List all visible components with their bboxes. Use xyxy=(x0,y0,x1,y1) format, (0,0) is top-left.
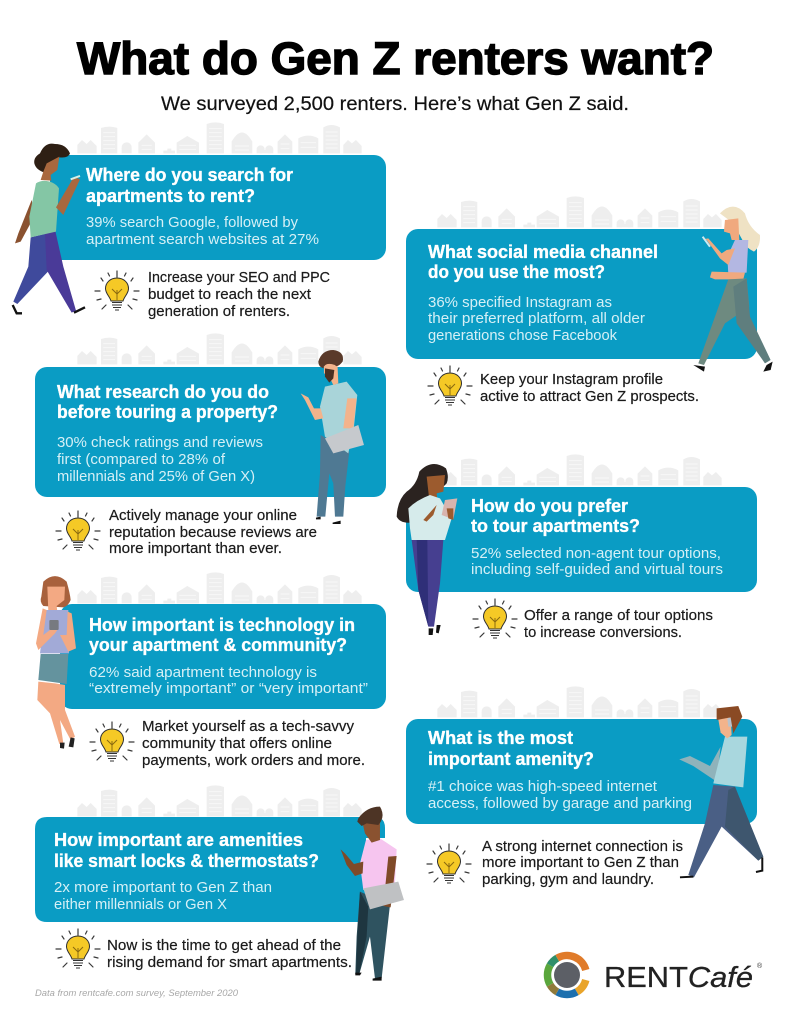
card background xyxy=(35,817,385,922)
heading: Where do you search for xyxy=(86,165,293,185)
tip text xyxy=(148,269,330,320)
panel: social media xyxy=(406,207,773,405)
heading xyxy=(89,615,355,655)
statistic text: apartment search websites at 27% xyxy=(86,231,319,248)
panel: smart amenities xyxy=(35,807,404,981)
tip text xyxy=(109,507,317,557)
tip text: generation of renters. xyxy=(148,303,290,320)
tip text: A strong internet connection is xyxy=(482,838,683,855)
panel: tour xyxy=(397,464,757,641)
card background xyxy=(60,604,386,709)
panel: amenity xyxy=(406,706,763,888)
heading: What social media channel xyxy=(428,242,658,262)
card background xyxy=(406,229,757,359)
heading: What research do you do xyxy=(57,382,269,402)
heading xyxy=(86,165,293,206)
figure: walking man xyxy=(13,144,85,313)
card background xyxy=(50,155,386,260)
logo mark xyxy=(547,956,586,995)
heading: How important are amenities xyxy=(54,830,303,850)
registered mark: ® xyxy=(757,962,763,970)
tip text xyxy=(524,607,713,641)
statistic text xyxy=(471,545,723,578)
heading xyxy=(54,830,319,871)
statistic text xyxy=(86,214,319,248)
tip text: Actively manage your online xyxy=(109,507,297,524)
title: What do Gen Z renters want? xyxy=(77,33,714,84)
statistic text xyxy=(428,294,645,344)
figure: blonde woman xyxy=(693,207,773,372)
tip text: Offer a range of tour options xyxy=(524,607,713,624)
statistic text xyxy=(89,664,368,697)
figure: woman with tablet xyxy=(397,464,457,635)
source note: Data from rentcafe.com survey, September 2020 xyxy=(35,988,239,999)
statistic text: 62% said apartment technology is xyxy=(89,664,317,681)
logo: RENTCafé xyxy=(547,956,763,995)
subtitle: We surveyed 2,500 renters. Here’s what Gen Z said. xyxy=(161,93,629,115)
statistic text: 39% search Google, followed by xyxy=(86,214,298,231)
tip text: budget to reach the next xyxy=(148,286,312,303)
statistic text xyxy=(54,879,272,913)
tip text: Increase your SEO and PPC xyxy=(148,269,330,286)
icon: light bulb xyxy=(90,722,134,761)
tip text: active to attract Gen Z prospects. xyxy=(480,388,699,405)
tip text xyxy=(107,937,352,971)
panel: research xyxy=(35,350,386,557)
statistic text: access, followed by garage and parking xyxy=(428,795,692,812)
heading: to tour apartments? xyxy=(471,516,640,536)
icon: light bulb xyxy=(56,929,100,968)
tip text: parking, gym and laundry. xyxy=(482,871,654,888)
heading: How important is technology in xyxy=(89,615,355,635)
card background xyxy=(406,719,757,824)
statistic text: including self-guided and virtual tours xyxy=(471,561,723,578)
statistic text: generations chose Facebook xyxy=(428,327,617,344)
heading: your apartment & community? xyxy=(89,635,347,655)
statistic text: either millennials or Gen X xyxy=(54,896,227,913)
tip text: rising demand for smart apartments. xyxy=(107,954,352,971)
heading: apartments to rent? xyxy=(86,186,255,206)
statistic text: “extremely important” or “very important” xyxy=(89,680,368,697)
heading xyxy=(428,728,594,769)
tip text: Keep your Instagram profile xyxy=(480,371,663,388)
figure: bearded man xyxy=(301,350,364,524)
figure: woman with laptop xyxy=(341,807,404,981)
heading xyxy=(428,242,658,282)
panel: search xyxy=(13,144,386,320)
heading: do you use the most? xyxy=(428,262,605,282)
heading: important amenity? xyxy=(428,749,594,769)
statistic text: 30% check ratings and reviews xyxy=(57,434,263,451)
figure: man on phone xyxy=(679,706,763,877)
logo wordmark: RENTCafé xyxy=(604,962,753,994)
statistic text xyxy=(428,778,692,812)
tip text: more important than ever. xyxy=(109,540,282,557)
tip text xyxy=(482,838,683,888)
icon: light bulb xyxy=(427,844,471,883)
tip text xyxy=(142,718,365,769)
icon: light bulb xyxy=(428,366,472,405)
tip text xyxy=(480,371,699,405)
statistic text xyxy=(57,434,263,485)
card background xyxy=(406,487,757,592)
figure: woman in shorts xyxy=(36,576,76,749)
icon: light bulb xyxy=(95,271,139,310)
statistic text: first (compared to 28% of xyxy=(57,451,226,468)
heading: How do you prefer xyxy=(471,496,628,516)
tip text: payments, work orders and more. xyxy=(142,752,365,769)
icon: light bulb xyxy=(56,511,100,550)
card background xyxy=(35,367,386,497)
tip text: Market yourself as a tech-savvy xyxy=(142,718,354,735)
tip text: community that offers online xyxy=(142,735,332,752)
tip text: more important to Gen Z than xyxy=(482,854,679,871)
statistic text: 2x more important to Gen Z than xyxy=(54,879,272,896)
tip text: Now is the time to get ahead of the xyxy=(107,937,341,954)
heading xyxy=(57,382,278,422)
heading: like smart locks & thermostats? xyxy=(54,851,319,871)
heading: before touring a property? xyxy=(57,402,278,422)
statistic text: their preferred platform, all older xyxy=(428,310,645,327)
statistic text: 52% selected non-agent tour options, xyxy=(471,545,721,562)
tip text: to increase conversions. xyxy=(524,624,682,641)
heading xyxy=(471,496,640,536)
statistic text: millennials and 25% of Gen X) xyxy=(57,468,255,485)
heading: What is the most xyxy=(428,728,573,748)
statistic text: #1 choice was high-speed internet xyxy=(428,778,658,795)
tip text: reputation because reviews are xyxy=(109,524,317,541)
panel: technology xyxy=(36,576,386,769)
icon: light bulb xyxy=(473,599,517,638)
statistic text: 36% specified Instagram as xyxy=(428,294,612,311)
